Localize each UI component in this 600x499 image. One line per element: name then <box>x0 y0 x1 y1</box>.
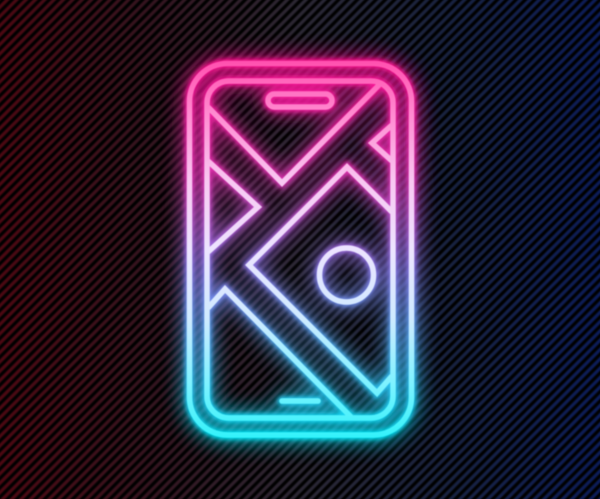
icon: neon smartphone with city map <box>190 64 412 435</box>
